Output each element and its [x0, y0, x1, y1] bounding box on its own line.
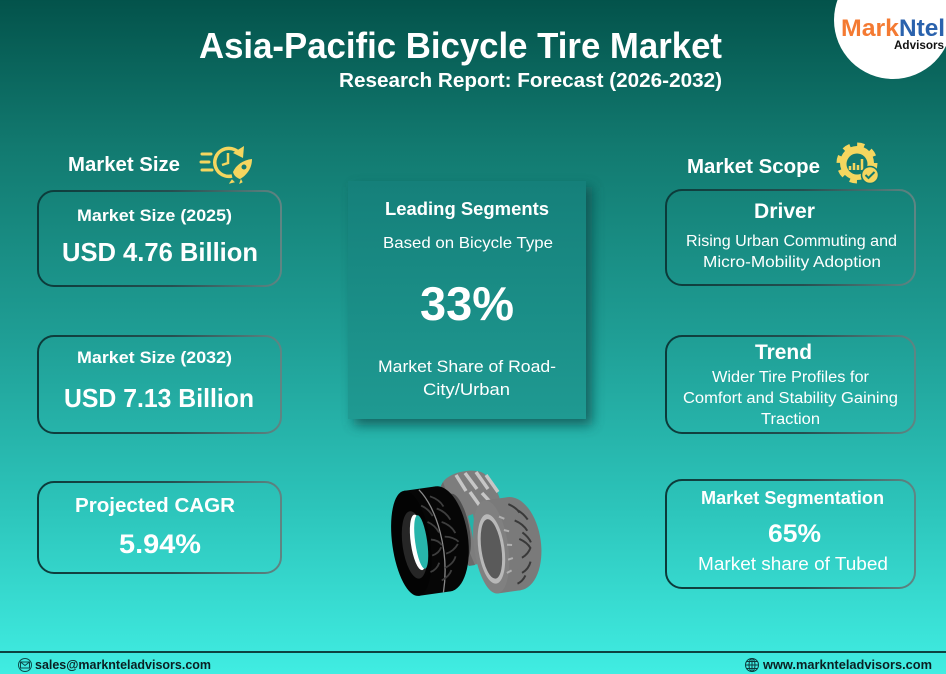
footer: website: www.marknteladvisors.com — [762, 657, 932, 672]
card: Market Segmentation: Market share of Tubed — [698, 554, 888, 574]
card: Trend: Trend — [755, 341, 812, 364]
card: Driver: Micro-Mobility Adoption — [703, 254, 881, 271]
card: Trend — [666, 336, 915, 433]
card: Driver: Rising Urban Commuting and — [686, 233, 897, 250]
card: Driver — [666, 190, 915, 285]
card: Market Segmentation: 65% — [768, 520, 821, 548]
card: Projected CAGR — [38, 482, 281, 573]
card: Market Size 2025: Market Size (2025) — [77, 206, 232, 225]
card: Market Size 2032: USD 7.13 Billion — [64, 383, 254, 413]
panel description: City/Urban — [423, 380, 510, 399]
card: Market Size 2032 — [38, 336, 281, 433]
panel description: Market Share of Road- — [378, 357, 556, 376]
card: Driver: Driver — [754, 200, 815, 223]
panel: leading segments — [348, 181, 592, 425]
card: Trend: Wider Tire Profiles for — [712, 369, 869, 386]
title: Asia-Pacific Bicycle Tire Market — [199, 25, 722, 66]
icon: gear with chart and check — [839, 145, 878, 184]
panel figure: 33% — [420, 277, 514, 330]
panel heading: Leading Segments — [385, 199, 549, 219]
icon: clock with rocket — [201, 146, 252, 183]
panel description — [378, 357, 556, 399]
tire: front grey — [468, 493, 547, 596]
card: Trend: Comfort and Stability Gaining — [683, 390, 898, 407]
footer: email: sales@marknteladvisors.com — [35, 657, 211, 672]
heading: Market Scope: Market Scope — [687, 156, 820, 178]
panel subheading: Based on Bicycle Type — [383, 235, 553, 252]
card: Market Size 2025 — [38, 191, 281, 286]
card: Trend: Traction — [761, 411, 820, 428]
logo: MarkNtel Advisors: Mark — [841, 15, 900, 42]
card: Market Size 2025: USD 4.76 Billion — [62, 237, 258, 267]
footer divider — [0, 651, 946, 653]
logo: MarkNtel Advisors — [834, 0, 946, 79]
tire: back grey — [440, 471, 503, 566]
card: Market Segmentation: Market Segmentation — [701, 488, 884, 508]
subtitle: Research Report: Forecast (2026-2032) — [339, 70, 722, 92]
logo: MarkNtel Advisors: Advisors — [894, 40, 944, 52]
card: Market Size 2032: Market Size (2032) — [77, 348, 232, 367]
card: Projected CAGR: 5.94% — [119, 529, 201, 559]
heading: Market Size: Market Size — [68, 154, 180, 176]
card: Market Segmentation — [666, 480, 915, 588]
icon: stack of tires — [385, 471, 547, 598]
logo: MarkNtel Advisors: Ntel — [899, 15, 945, 42]
tire: front black — [385, 483, 475, 598]
card: Projected CAGR: Projected CAGR — [75, 495, 236, 517]
